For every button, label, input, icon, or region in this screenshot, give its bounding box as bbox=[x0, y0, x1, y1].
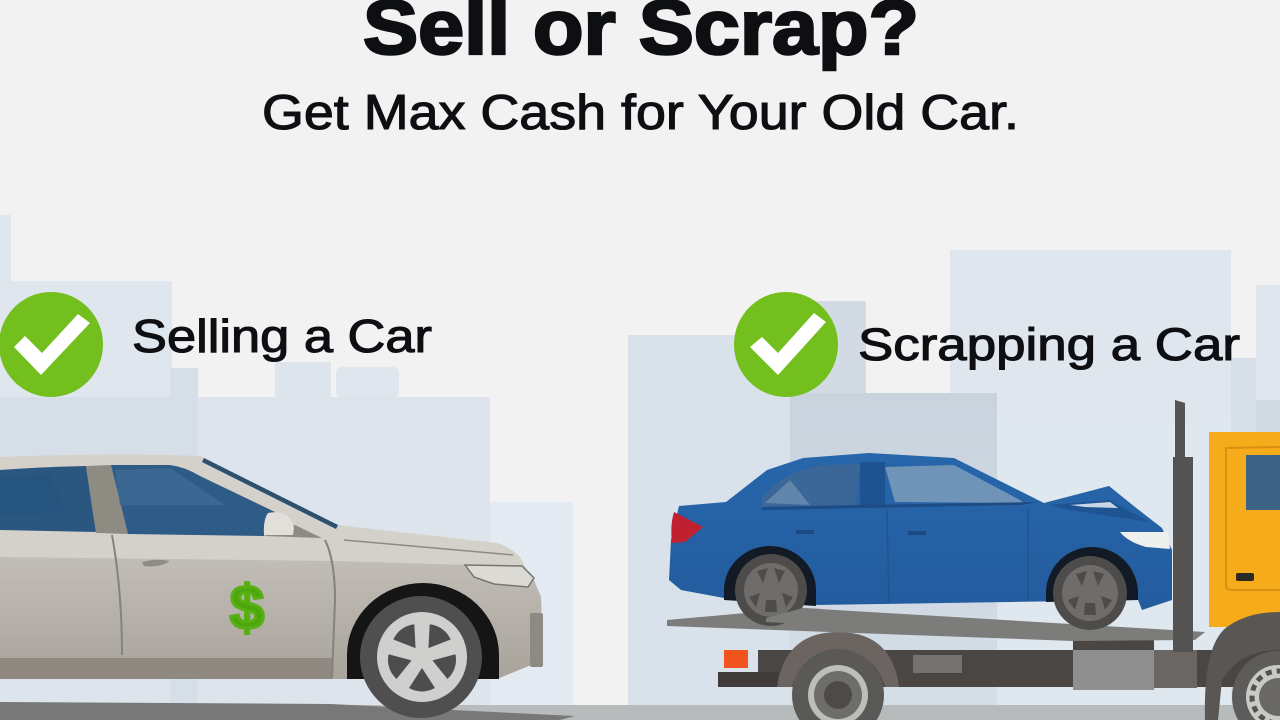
city skyline right bbox=[628, 250, 1280, 720]
cab door bbox=[1226, 447, 1280, 590]
truck cab bbox=[1209, 432, 1280, 627]
door pillar bbox=[860, 462, 885, 506]
car body bbox=[0, 455, 543, 679]
wheel bbox=[360, 596, 482, 718]
window sill bbox=[762, 502, 1040, 510]
cab handle bbox=[1236, 573, 1254, 581]
car body bbox=[669, 453, 1172, 610]
hood line bbox=[344, 540, 513, 555]
tow truck bbox=[667, 400, 1280, 720]
window trim bbox=[264, 525, 322, 538]
city skyline left bbox=[0, 215, 573, 720]
tail light bbox=[671, 512, 703, 543]
blue damaged car bbox=[669, 453, 1172, 630]
headlight bbox=[465, 565, 534, 587]
front window bbox=[885, 465, 1024, 503]
hood crease bbox=[1049, 500, 1150, 522]
door lines bbox=[887, 508, 1028, 603]
front fender bbox=[1205, 612, 1280, 720]
door lines bbox=[112, 535, 335, 678]
wheel arch bbox=[347, 583, 499, 679]
flatbed bbox=[667, 608, 1205, 641]
front truck wheel bbox=[1232, 651, 1280, 720]
tow column bbox=[1173, 400, 1193, 652]
side mirror bbox=[264, 512, 294, 535]
subtitle: Get Max Cash for Your Old Car. bbox=[262, 86, 1019, 140]
front wheel bbox=[1046, 547, 1138, 630]
tail light bbox=[724, 650, 748, 668]
dollar sign: $ bbox=[230, 574, 264, 643]
heading: scrapping a car: Scrapping a Car bbox=[858, 319, 1240, 370]
heading: selling a car: Selling a Car bbox=[132, 310, 432, 362]
chassis bbox=[758, 650, 1280, 687]
headlight bbox=[1120, 532, 1170, 549]
pillar bbox=[86, 465, 128, 534]
icon: scrapping check badge bbox=[734, 292, 838, 397]
rear truck wheel bbox=[792, 649, 884, 720]
front window bbox=[111, 465, 275, 536]
rear fender bbox=[777, 632, 899, 687]
rear wheel bbox=[724, 546, 816, 626]
silver car for sale bbox=[0, 455, 543, 718]
door handles bbox=[796, 530, 814, 534]
rear window bbox=[0, 466, 96, 532]
cab window bbox=[1246, 455, 1280, 510]
door handle bbox=[142, 560, 170, 566]
icon: selling check badge bbox=[0, 292, 103, 397]
storage boxes bbox=[913, 655, 962, 673]
road bbox=[0, 702, 1280, 720]
rear window bbox=[762, 464, 860, 507]
flatbed front of rear wheel bbox=[766, 608, 822, 625]
windshield strip bbox=[203, 460, 337, 527]
bumper bbox=[530, 613, 543, 667]
